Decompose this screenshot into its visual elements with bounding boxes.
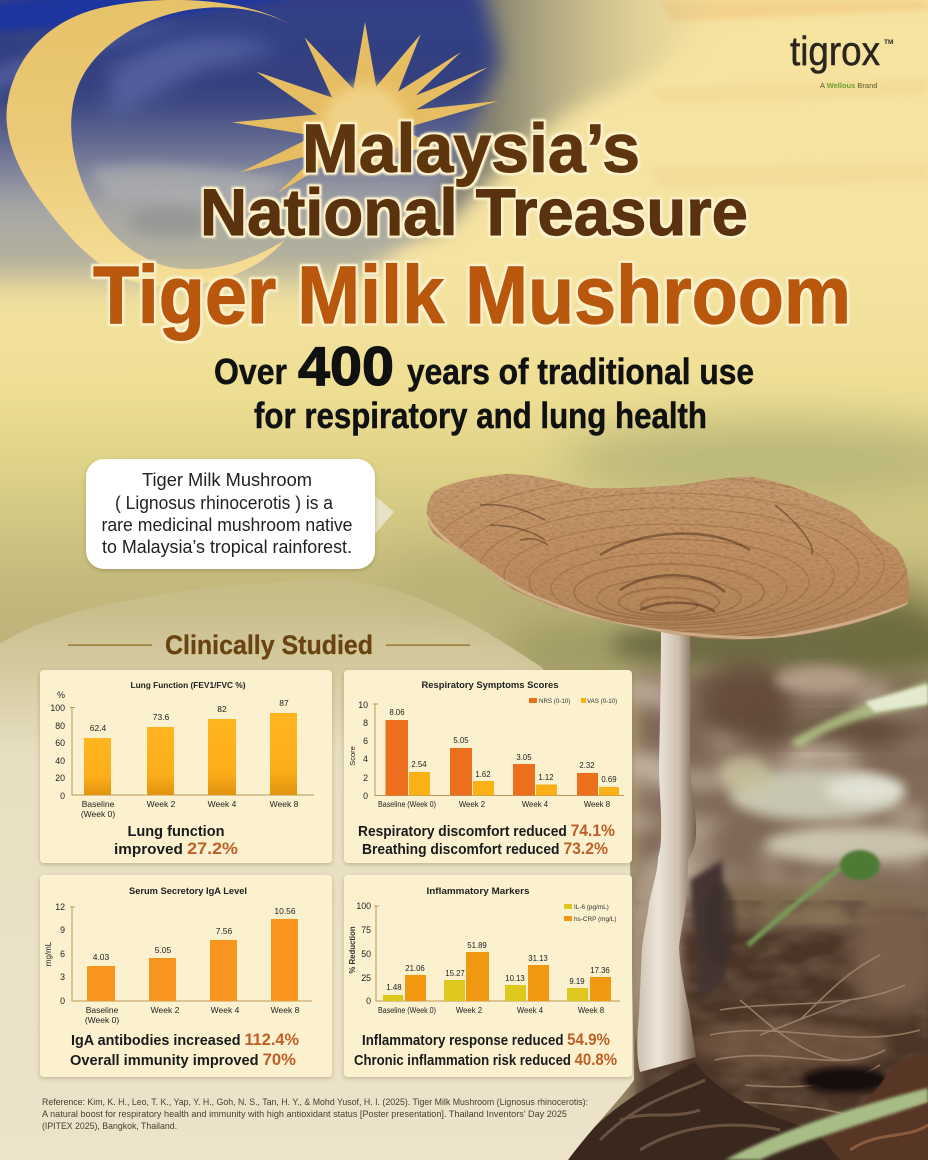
bar chart: inflammatory: Week 4 xyxy=(517,1006,544,1015)
title: National Treasure xyxy=(200,175,748,249)
bar chart: inflammatory: 0 xyxy=(366,996,371,1006)
bar chart: inflammatory: 9.19 xyxy=(569,977,585,986)
mushroom stem xyxy=(637,632,696,1072)
bar chart: symptoms: 0 xyxy=(363,791,368,801)
icon: federal star xyxy=(232,22,500,201)
bar chart: lung function: Week 4 xyxy=(208,799,237,809)
bar chart: lung function: Week 8 xyxy=(270,799,299,809)
section heading: Clinically Studied xyxy=(165,630,373,660)
result text xyxy=(358,822,615,858)
cream arc backdrop xyxy=(0,580,634,1160)
bar chart: IgA: 0 xyxy=(60,996,65,1006)
bar chart: IgA: 5.05 xyxy=(155,945,172,955)
bar chart: inflammatory: % Reduction xyxy=(348,926,357,974)
subtitle: years of traditional use xyxy=(407,351,754,392)
bar chart: inflammatory: 100 xyxy=(356,901,371,911)
title: Malaysia’s xyxy=(302,110,640,187)
bar chart: lung function: 40 xyxy=(55,756,65,766)
result text: Overall immunity improved 70% xyxy=(70,1051,296,1069)
bar chart: symptoms: Week 2 xyxy=(459,800,485,809)
subtitle xyxy=(214,335,754,436)
brand logo: A Wellous Brand xyxy=(820,81,877,90)
forest photo backdrop xyxy=(380,420,928,1160)
panel: serum IgA xyxy=(40,875,332,1077)
bar chart: IgA: 7.56 xyxy=(216,926,233,936)
bar chart: inflammatory: Baseline (Week 0) xyxy=(378,1006,436,1015)
bar chart: IgA: 4.03 xyxy=(93,952,110,962)
panel: lung function xyxy=(40,670,332,863)
bar chart: symptoms: 1.62 xyxy=(475,770,491,779)
reference text: Reference: Kim, K. H., Leo, T. K., Yap, Y. H., Goh, N. S., Tan, H. Y., & Mohd Yusof, H. I. (2025). Tiger Milk Mushroom (Lignosus rhinocerotis): xyxy=(42,1097,588,1107)
bar chart: symptoms: Score xyxy=(348,746,357,766)
bar chart: IgA: Week 2 xyxy=(151,1005,180,1015)
bar chart: inflammatory: 1.48 xyxy=(386,983,402,992)
bar chart: IgA: Week 8 xyxy=(271,1005,300,1015)
bar chart: inflammatory: 51.89 xyxy=(467,941,487,950)
bar chart: IgA: 3 xyxy=(60,972,65,982)
panel: respiratory symptoms xyxy=(344,670,632,863)
callout xyxy=(86,459,394,569)
legend: NRS (0-10) xyxy=(539,698,570,705)
bar chart: inflammatory: 50 xyxy=(361,949,371,959)
bar chart: symptoms: 2.32 xyxy=(579,761,595,770)
bar chart: lung function: 62.4 xyxy=(90,723,107,733)
bar chart: IgA: mg/mL xyxy=(44,941,53,966)
bar chart: lung function: 80 xyxy=(55,721,65,731)
bar chart: symptoms: 4 xyxy=(363,754,368,764)
bar chart: symptoms: 1.12 xyxy=(538,773,554,782)
panel: lung function: Lung Function (FEV1/FVC %) xyxy=(130,680,246,690)
result text: Lung function xyxy=(128,824,224,840)
brand logo: TM xyxy=(884,39,893,46)
bar chart: inflammatory: 75 xyxy=(361,925,371,935)
legend xyxy=(564,904,616,923)
bar chart: symptoms: 8 xyxy=(363,718,368,728)
panel: inflammatory markers: Inflammatory Markers xyxy=(426,886,530,896)
bar chart: inflammatory: Week 2 xyxy=(456,1006,482,1015)
bar chart: lung function: 73.6 xyxy=(153,712,170,722)
bar chart: symptoms: Week 8 xyxy=(584,800,610,809)
result text: Breathing discomfort reduced 73.2% xyxy=(362,840,608,858)
bar chart: symptoms: Week 4 xyxy=(522,800,549,809)
result text: improved 27.2% xyxy=(114,839,238,858)
callout: rare medicinal mushroom native xyxy=(102,515,352,535)
panel: inflammatory markers xyxy=(344,875,632,1077)
bar chart: inflammatory: 10.13 xyxy=(505,974,525,983)
bar chart: lung function: % xyxy=(57,690,65,700)
brand logo: tigrox xyxy=(790,28,880,74)
bar chart: lung function: 82 xyxy=(217,704,227,714)
reference text xyxy=(42,1097,588,1131)
bar chart: lung function: 100 xyxy=(50,703,65,713)
bar chart: lung function: 87 xyxy=(279,698,289,708)
result text: Respiratory discomfort reduced 74.1% xyxy=(358,822,615,840)
reference text: A natural boost for respiratory health and immunity with high antioxidant status [Poster presentation]. Thailand Inventors’ Day 2025 xyxy=(42,1109,567,1119)
legend: VAS (0-10) xyxy=(587,698,617,705)
title: Tiger Milk Mushroom xyxy=(93,250,851,341)
subtitle: for respiratory and lung health xyxy=(254,395,707,436)
bar chart: symptoms: 8.06 xyxy=(389,708,405,717)
bar chart: lung function: 20 xyxy=(55,773,65,783)
callout: Tiger Milk Mushroom xyxy=(142,470,312,490)
callout: ( Lignosus rhinocerotis ) is a xyxy=(115,493,334,513)
icon: crescent moon xyxy=(6,0,293,286)
subtitle: 400 xyxy=(298,335,394,397)
bar chart: lung function xyxy=(50,690,314,819)
bar chart: symptoms: 3.05 xyxy=(516,753,532,762)
callout: to Malaysia’s tropical rainforest. xyxy=(102,537,352,557)
bar chart: IgA: 12 xyxy=(55,902,65,912)
result text xyxy=(70,1031,299,1069)
result text: Inflammatory response reduced 54.9% xyxy=(362,1031,610,1049)
bar chart: lung function: 60 xyxy=(55,738,65,748)
legend: hs-CRP (mg/L) xyxy=(574,916,616,923)
result text: IgA antibodies increased 112.4% xyxy=(71,1031,299,1049)
bar chart: symptoms: 2 xyxy=(363,773,368,783)
subtitle: Over xyxy=(214,351,287,392)
mushroom xyxy=(420,465,915,1072)
bar chart: lung function: Baseline xyxy=(82,799,115,809)
bar chart: lung function: Week 2 xyxy=(147,799,176,809)
result text: Chronic inflammation risk reduced 40.8% xyxy=(354,1051,617,1069)
bar chart: IgA: 6 xyxy=(60,949,65,959)
bar chart: symptoms: 6 xyxy=(363,736,368,746)
bar chart: inflammatory: 17.36 xyxy=(590,966,610,975)
legend: IL-6 (pg/mL) xyxy=(574,904,609,911)
result text xyxy=(114,824,238,858)
bar chart: symptoms: 2.54 xyxy=(411,760,427,769)
reference text: (IPITEX 2025), Bangkok, Thailand. xyxy=(42,1121,177,1131)
bar chart: inflammatory: Week 8 xyxy=(578,1006,604,1015)
bar chart: IgA: 10.56 xyxy=(274,906,296,916)
bar chart: IgA: Baseline xyxy=(86,1005,119,1015)
bar chart: lung function: 0 xyxy=(60,791,65,801)
panel: serum IgA: Serum Secretory IgA Level xyxy=(129,886,247,896)
bar chart: inflammatory: 31.13 xyxy=(528,954,548,963)
bar chart: IgA: Week 4 xyxy=(211,1005,240,1015)
panel: respiratory symptoms: Respiratory Symptoms Scores xyxy=(422,680,558,690)
title xyxy=(93,110,851,341)
bar chart: lung function: (Week 0) xyxy=(81,809,115,819)
bar chart: symptoms: Baseline (Week 0) xyxy=(378,800,436,809)
bar chart: inflammatory: 21.06 xyxy=(405,964,425,973)
bar chart: inflammatory: 15.27 xyxy=(445,969,465,978)
bar chart: IgA: (Week 0) xyxy=(85,1015,119,1025)
bar chart: symptoms: 0.69 xyxy=(601,775,617,784)
mushroom cap xyxy=(426,474,910,640)
bar chart: inflammatory: 25 xyxy=(361,973,371,983)
result text xyxy=(354,1031,617,1069)
bar chart: symptoms: 5.05 xyxy=(453,736,469,745)
bar chart: IgA: 9 xyxy=(60,925,65,935)
bar chart: symptoms xyxy=(348,698,624,809)
legend xyxy=(529,698,617,705)
bar chart: IgA xyxy=(44,902,312,1025)
flag blue field xyxy=(0,0,500,310)
bar chart: inflammatory xyxy=(348,901,620,1015)
bar chart: symptoms: 10 xyxy=(358,700,368,710)
